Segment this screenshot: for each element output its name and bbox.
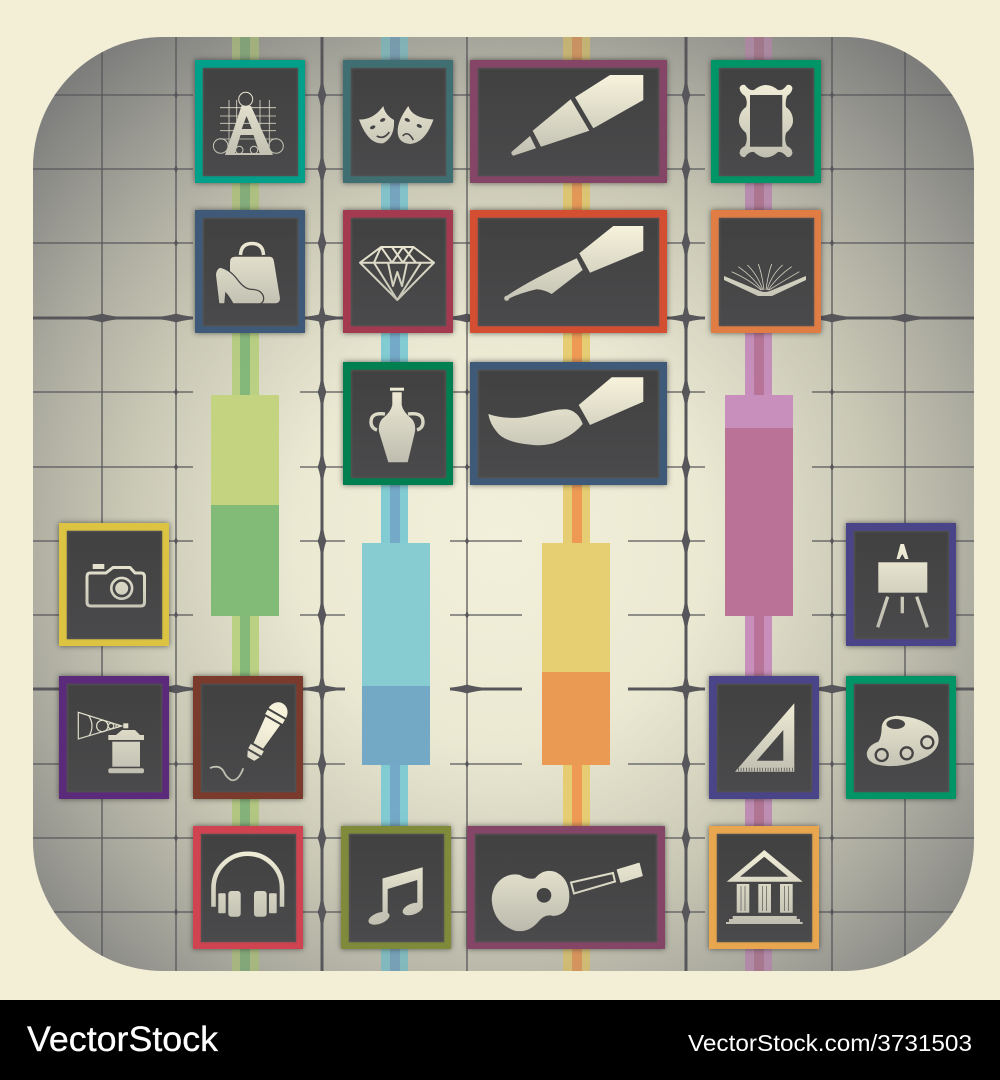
tile: marker pen [470,60,667,183]
icon: headset [214,854,282,917]
icon: acoustic guitar [492,864,642,931]
icon: nib pen [504,226,643,301]
tile: camera [59,523,169,646]
icon: beamed notes [367,867,424,927]
icon: brush [488,377,643,445]
footer brand: VectorStock [27,1020,219,1059]
icon: classical building [726,850,803,924]
tile: museum [709,826,819,949]
column: green strip and bar [211,37,279,971]
icon: photo camera [87,564,144,606]
tile: paint brush [470,362,667,485]
icon: painting easel [878,544,927,627]
icon: microphone and cable [210,698,291,780]
tile: fountain pen [470,210,667,333]
tile: picture frame [711,60,821,183]
tile: guitar [467,826,665,949]
icon: cut gem [360,247,434,300]
tile: palette [846,676,956,799]
column: blue strip and bar [362,37,430,971]
icon: marker [511,75,643,156]
icon: aerosol spray [78,712,144,773]
icon: letter A construction [213,92,283,155]
tile: set square [709,676,819,799]
icon: handbag and high heel [216,244,280,303]
footer bar [0,1000,1000,1080]
tile: diamond [343,210,453,333]
tile: headphones [193,826,303,949]
tile: easel [846,523,956,646]
column: pink strip and bar [725,37,793,971]
tile: lettering compass [195,60,305,183]
tile: microphone [193,676,303,799]
tile: open book [711,210,821,333]
icon: ornate frame [739,85,793,158]
tile: amphora [343,362,453,485]
tile: spray can [59,676,169,799]
tile: shoe and bag [195,210,305,333]
icon: triangle ruler [735,703,794,772]
icon: comedy and tragedy masks [359,106,434,144]
icon: vase with handles [371,388,423,462]
tile: theatre masks [343,60,453,183]
tile: music note [341,826,451,949]
icon: open book with fanned pages [724,264,806,296]
column: orange strip and bar [542,37,610,971]
icon: artist palette [867,716,939,766]
footer image id: VectorStock.com/3731503 [688,1030,972,1056]
